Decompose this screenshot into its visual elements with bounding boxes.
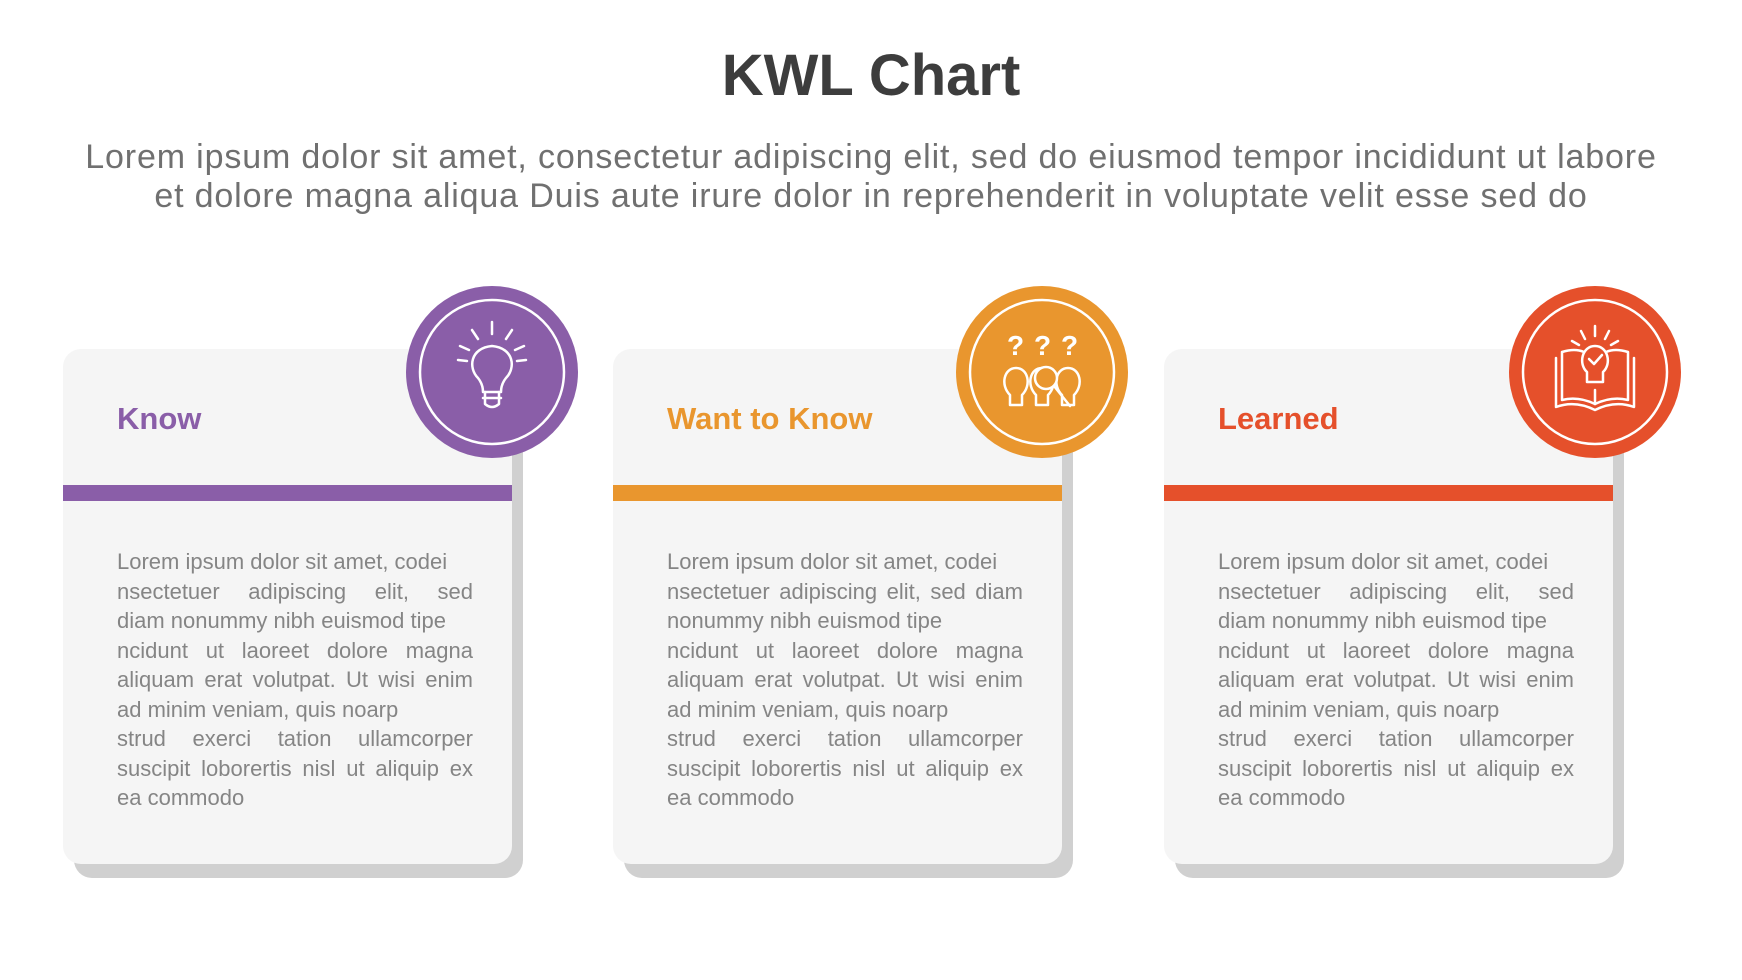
text: know: ea commodo [117, 785, 244, 810]
text: want [667, 549, 1023, 810]
text: learned: strud exerci tation ullamcorper [1218, 726, 1574, 751]
icon: questions and bulbs: ? [1034, 330, 1051, 361]
text: learned: ad minim veniam, quis noarp [1218, 696, 1499, 722]
bar: want [613, 485, 1062, 501]
panel: want to know [613, 349, 1073, 878]
text: want: suscipit loborertis nisl ut aliquip ex [667, 756, 1023, 780]
text: know [117, 549, 473, 810]
icon: questions and bulbs: ? [1061, 330, 1078, 361]
text: learned: aliquam erat volutpat. Ut wisi enim [1218, 667, 1574, 692]
text: know: ncidunt ut laoreet dolore magna [117, 638, 473, 662]
bar: know [63, 485, 512, 501]
text: want: nsectetuer adipiscing elit, sed diam [667, 578, 1023, 604]
text: want: aliquam erat volutpat. Ut wisi enim [667, 667, 1023, 692]
text: know: diam nonummy nibh euismod tipe [117, 608, 446, 633]
subtitle [85, 138, 1657, 215]
text: know: strud exerci tation ullamcorper [117, 726, 473, 751]
bar: learned [1164, 485, 1613, 501]
subtitle: et dolore magna aliqua Duis aute irure dolor in reprehenderit in voluptate velit esse sed do [154, 177, 1588, 215]
icon: questions and bulbs [956, 286, 1128, 458]
text: want: nonummy nibh euismod tipe [667, 608, 942, 633]
text: know: suscipit loborertis nisl ut aliquip ex [117, 756, 473, 780]
text: want: strud exerci tation ullamcorper [667, 726, 1023, 751]
text: want: Lorem ipsum dolor sit amet, codei [667, 549, 997, 574]
text: learned: diam nonummy nibh euismod tipe [1218, 608, 1547, 633]
title: KWL Chart [722, 43, 1020, 108]
panel: learned [1164, 349, 1624, 878]
icon: questions and bulbs: ? [1007, 330, 1024, 361]
text: learned: nsectetuer adipiscing elit, sed [1218, 578, 1574, 604]
icon: book with bulb [1509, 286, 1681, 458]
text: want: ncidunt ut laoreet dolore magna [667, 638, 1023, 662]
heading: want: Want to Know [667, 401, 872, 436]
text: want: ad minim veniam, quis noarp [667, 696, 948, 722]
text: know: nsectetuer adipiscing elit, sed [117, 578, 473, 604]
subtitle: Lorem ipsum dolor sit amet, consectetur adipiscing elit, sed do eiusmod tempor incididunt ut labore [85, 138, 1657, 176]
panel: know [63, 349, 523, 878]
text: learned [1218, 549, 1574, 810]
text: learned: ncidunt ut laoreet dolore magna [1218, 638, 1574, 662]
icon: lightbulb [406, 286, 578, 458]
text: learned: Lorem ipsum dolor sit amet, codei [1218, 549, 1548, 574]
text: learned: suscipit loborertis nisl ut aliquip ex [1218, 756, 1574, 780]
text: want: ea commodo [667, 785, 794, 810]
text: know: ad minim veniam, quis noarp [117, 696, 398, 722]
text: know: aliquam erat volutpat. Ut wisi enim [117, 667, 473, 692]
text: learned: ea commodo [1218, 785, 1345, 810]
heading: know: Know [117, 401, 201, 436]
text: know: Lorem ipsum dolor sit amet, codei [117, 549, 447, 574]
heading: learned: Learned [1218, 401, 1339, 436]
